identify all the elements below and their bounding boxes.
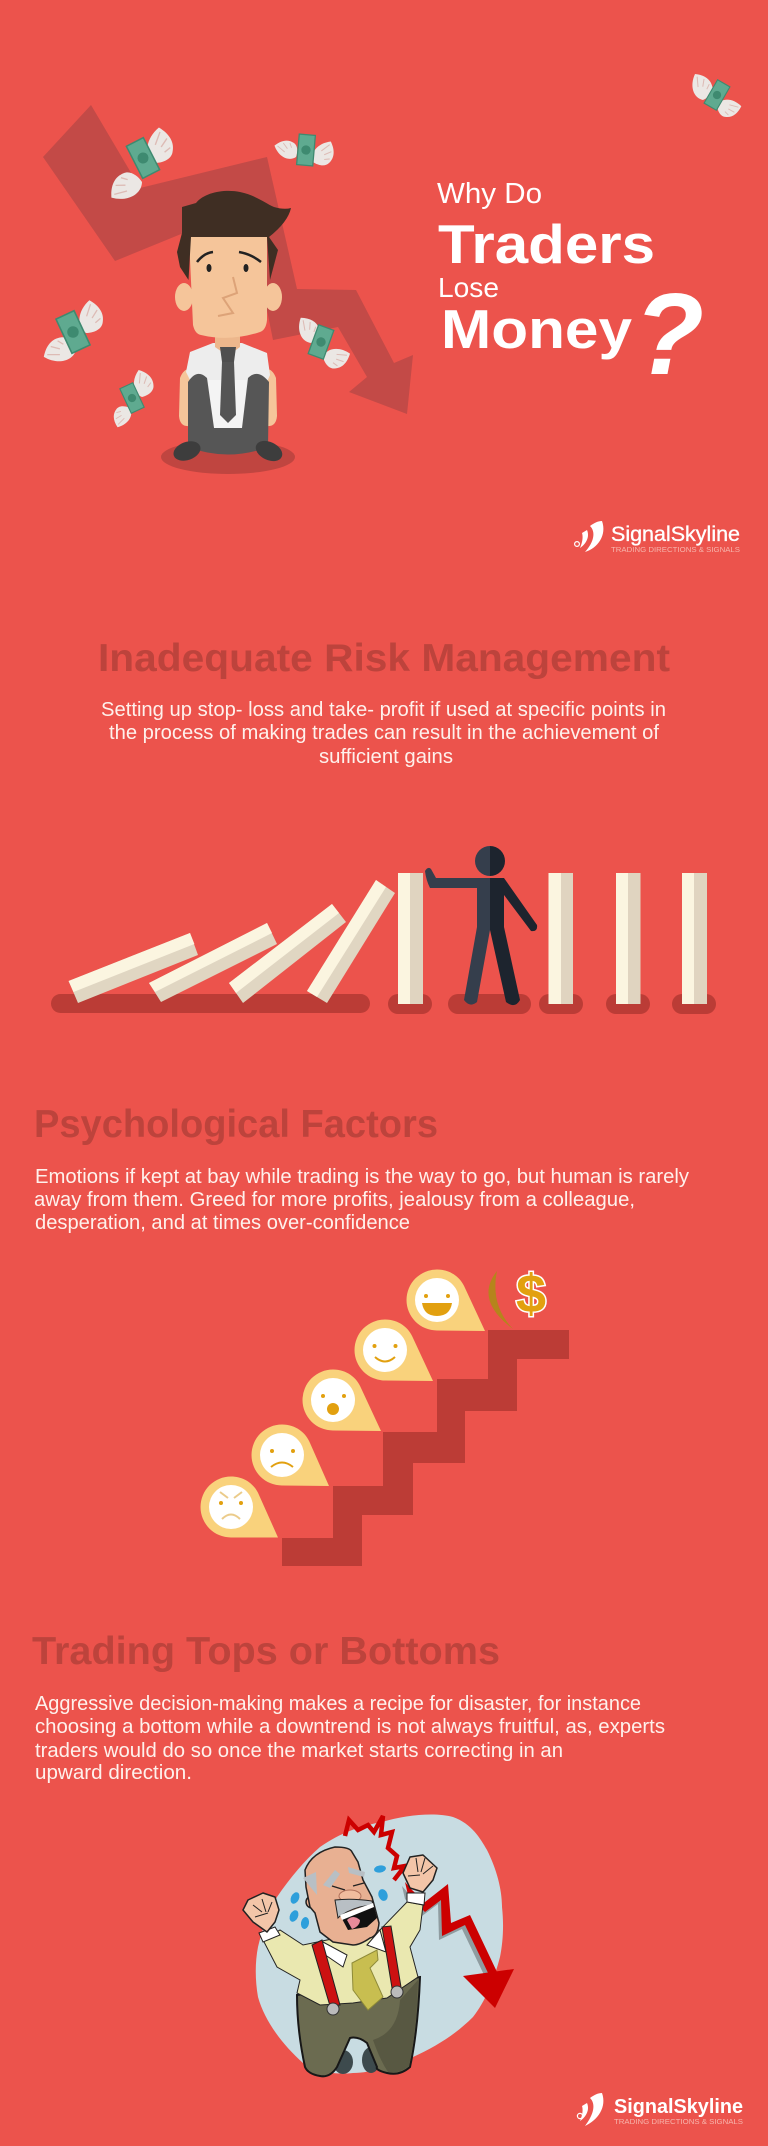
- icon: flying money 5: [108, 370, 155, 429]
- illustration: crying trader with falling chart: [243, 1815, 514, 2076]
- text block: psychological factors: away from them. Greed for more profits, jealousy from a colleague,: [34, 1189, 635, 1211]
- icon: sad face pin: [252, 1424, 329, 1486]
- text block: psychological factors: Emotions if kept at bay while trading is the way to go, but human is rarely: [35, 1166, 689, 1188]
- icon: flying money 1: [106, 126, 179, 202]
- icon: flying money top right: [691, 73, 742, 120]
- icon: flying money 4: [297, 315, 350, 370]
- heading: Inadequate Risk Management: Inadequate Risk Management: [98, 637, 670, 680]
- title: Why Do: [437, 178, 542, 210]
- logo top: TRADING DIRECTIONS & SIGNALS: [611, 547, 740, 554]
- logo bottom: [577, 2093, 743, 2126]
- text block: risk management: the process of making trades can result in the achievement of: [109, 722, 659, 744]
- text block: trading tops or bottoms: traders would do so once the market starts correcting in an: [35, 1740, 563, 1762]
- hero illustration: falling arrow behind sad trader: [43, 105, 413, 414]
- title: ?: [634, 269, 704, 399]
- text block: risk management: sufficient gains: [319, 746, 453, 768]
- chart: emotion stairs: [282, 1330, 569, 1566]
- text block: trading tops or bottoms: [35, 1693, 665, 1784]
- icon: flying money 2: [272, 134, 341, 170]
- text block: psychological factors: desperation, and at times over-confidence: [35, 1212, 410, 1234]
- icon: angry face pin: [201, 1476, 278, 1538]
- title: Lose: [438, 272, 499, 303]
- logo bottom: TRADING DIRECTIONS & SIGNALS: [614, 2119, 743, 2126]
- logo bottom: SignalSkyline: [614, 2096, 743, 2118]
- icon: laughing face pin: [407, 1270, 485, 1331]
- text block: psychological factors: [34, 1166, 689, 1234]
- heading: Psychological Factors: Psychological Factors: [34, 1103, 438, 1146]
- heading: Trading Tops or Bottoms: Trading Tops or Bottoms: [32, 1630, 500, 1673]
- text block: trading tops or bottoms: choosing a bottom while a downtrend is not always fruitful, as, experts: [35, 1716, 665, 1738]
- text block: trading tops or bottoms: Aggressive decision-making makes a recipe for disaster, for instance: [35, 1693, 641, 1715]
- illustration: sad trader sitting: [161, 191, 295, 474]
- logo top: SignalSkyline: [611, 523, 740, 546]
- text block: trading tops or bottoms: upward direction.: [35, 1762, 192, 1784]
- text block: risk management: [101, 699, 666, 768]
- icon: surprised face pin: [303, 1370, 381, 1431]
- text block: risk management: Setting up stop- loss and take- profit if used at specific points in: [101, 699, 666, 721]
- title: [437, 178, 704, 399]
- logo top: [575, 521, 740, 554]
- title: Money: [441, 298, 632, 360]
- icon: smile face pin: [355, 1320, 433, 1381]
- title: Traders: [438, 213, 655, 275]
- illustration: dominoes stopped by person: [51, 846, 716, 1014]
- icon: gold crescent: [488, 1271, 513, 1329]
- icon: flying money 3: [44, 299, 108, 361]
- icon: dollar sign: $: [516, 1264, 546, 1324]
